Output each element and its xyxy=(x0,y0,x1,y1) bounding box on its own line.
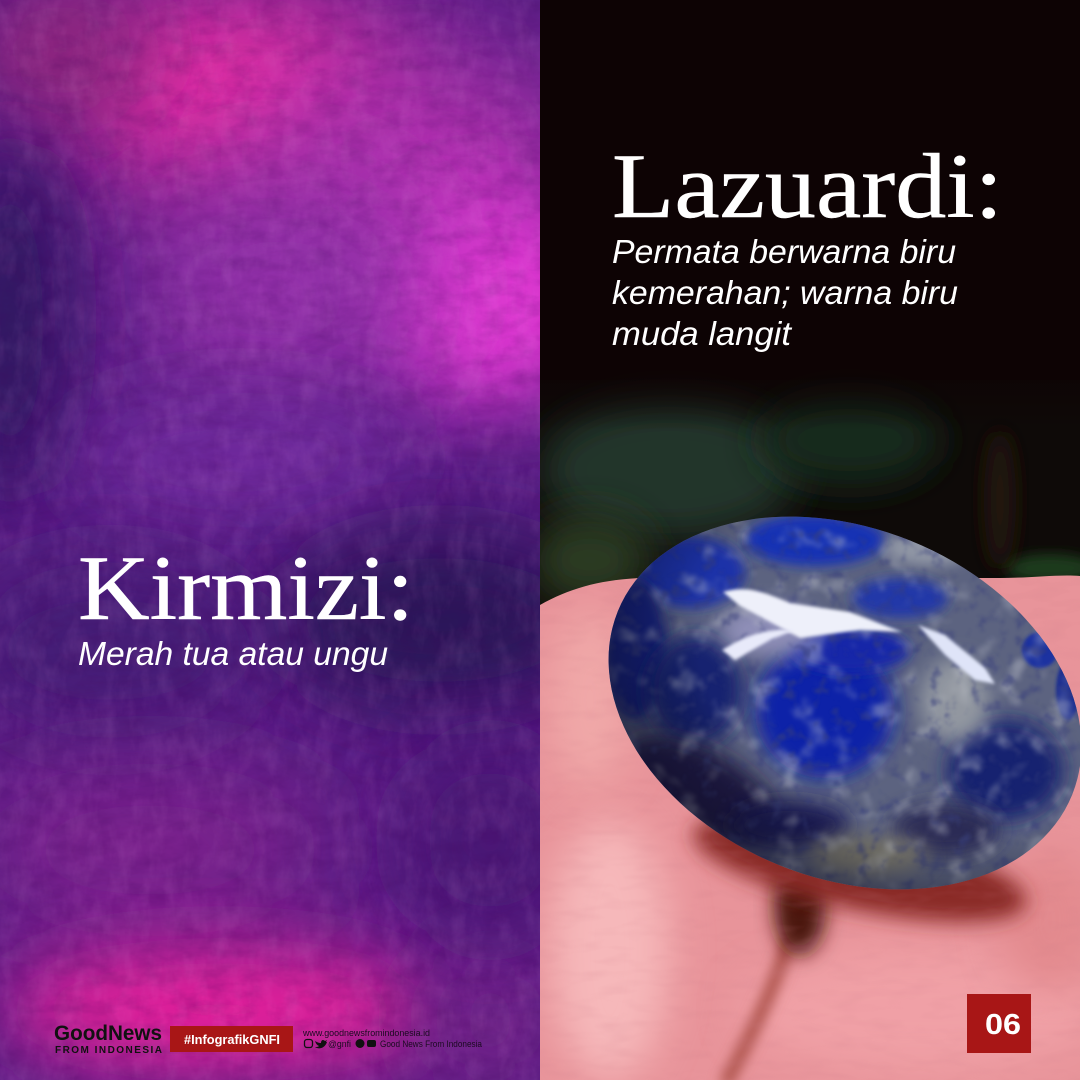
icon: twitter xyxy=(315,1040,327,1048)
text: Lazuardi definition xyxy=(612,233,958,352)
heading: Kirmizi: Kirmizi: xyxy=(78,537,414,639)
fingers: skin xyxy=(540,570,1080,1080)
panel: kirmizi purple textured background xyxy=(0,0,540,1080)
text: Kirmizi definition: Merah tua atau ungu xyxy=(78,635,388,672)
icon: lapis lazuli stone xyxy=(608,516,1080,890)
shadow beneath stone xyxy=(680,813,1039,938)
text: website and social accounts xyxy=(302,1028,482,1049)
finger crease xyxy=(714,926,798,1080)
panel: lazuardi photo xyxy=(530,0,1080,1080)
badge: InfografikGNFI hashtag: #InfografikGNFI xyxy=(184,1033,280,1047)
badge: InfografikGNFI hashtag xyxy=(170,1026,293,1052)
logo: GoodNews From Indonesia xyxy=(54,1022,162,1056)
icon: youtube xyxy=(367,1040,376,1047)
text: website and social accounts: www.goodnewsfromindonesia.id xyxy=(302,1028,430,1038)
text: Lazuardi definition: kemerahan; warna biru xyxy=(612,274,958,311)
badge: page number: 06 xyxy=(985,1009,1021,1041)
icon: instagram xyxy=(304,1040,312,1048)
text: Lazuardi definition: muda langit xyxy=(612,315,793,352)
logo: GoodNews From Indonesia: GoodNews xyxy=(54,1022,162,1045)
blurred foliage background xyxy=(540,389,1080,605)
highlights xyxy=(723,589,902,638)
badge: page number xyxy=(967,994,1031,1053)
heading: Lazuardi: Lazuardi: xyxy=(612,135,1003,237)
logo: GoodNews From Indonesia: FROM INDONESIA xyxy=(55,1045,162,1056)
text: Lazuardi definition: Permata berwarna biru xyxy=(612,233,956,270)
text: website and social accounts: @gnfi xyxy=(328,1039,351,1049)
text: website and social accounts: Good News From Indonesia xyxy=(380,1039,482,1049)
icon: facebook xyxy=(356,1039,364,1048)
